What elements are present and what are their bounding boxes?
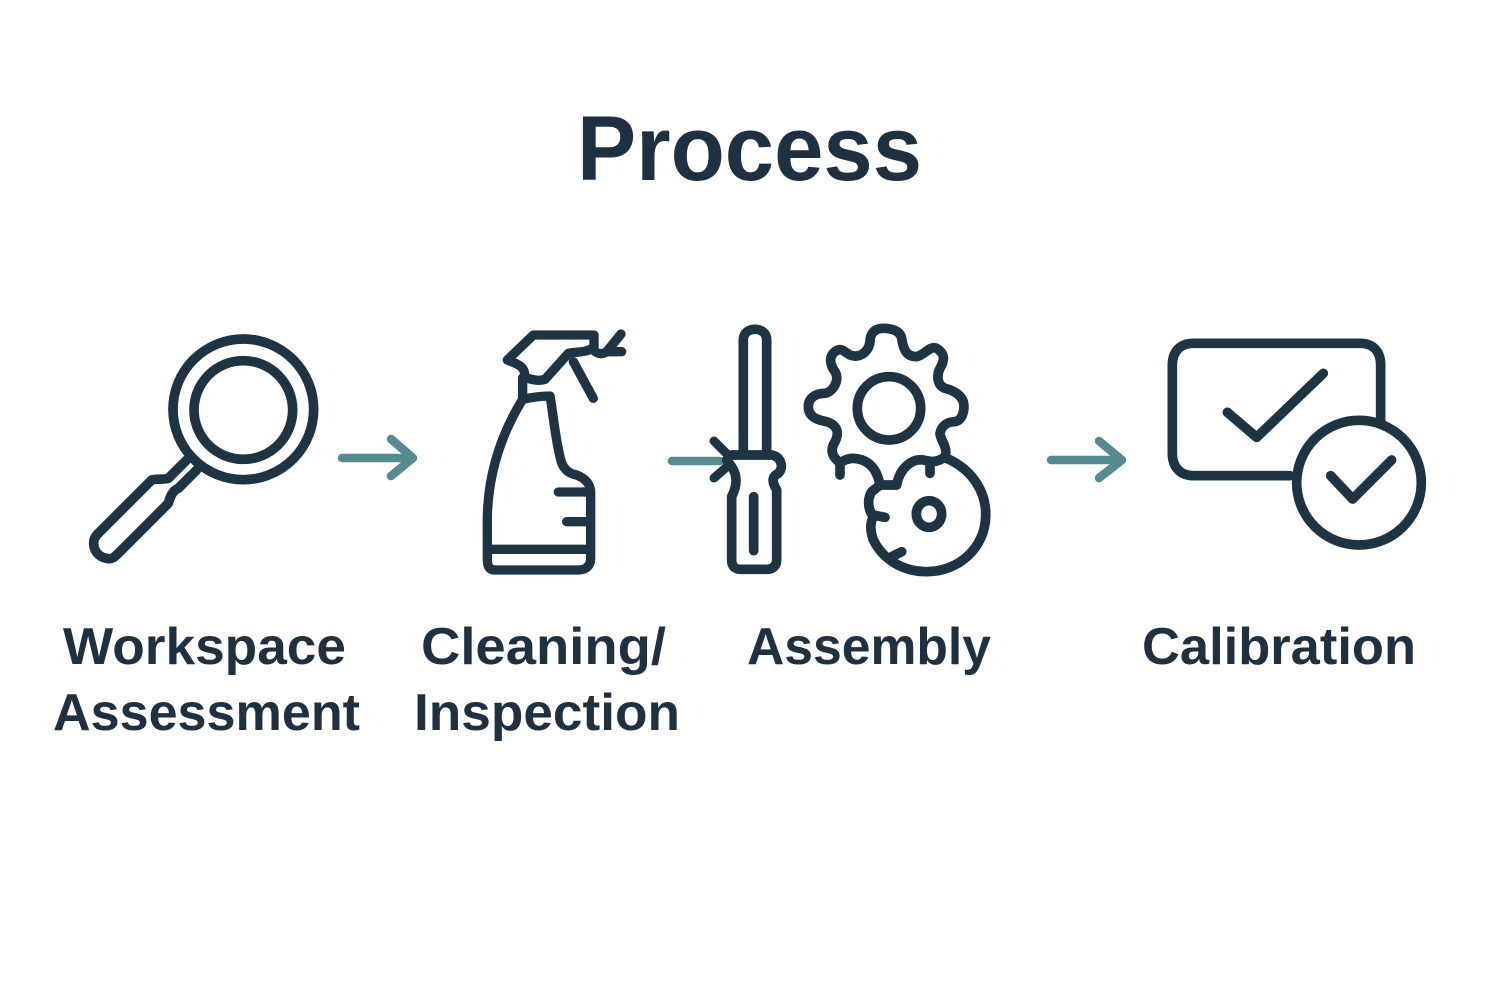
arrow: step 2 to step 3 [672,441,729,478]
label: workspace assessment: Workspace [63,618,346,676]
icon: calibration checks [1172,343,1421,545]
label: cleaning / inspection: Cleaning/ [421,618,666,676]
arrow: step 3 to step 4 [1051,441,1122,478]
label: calibration: Calibration [1142,618,1416,676]
icon: spray bottle [487,334,622,570]
arrow: step 1 to step 2 [342,439,413,476]
title: Process [577,98,922,200]
icon: gears [808,328,986,572]
label: assembly: Assembly [747,618,991,676]
label: cleaning / inspection [414,618,680,742]
label: workspace assessment [53,618,360,742]
label: workspace assessment: Assessment [53,684,360,742]
label: cleaning / inspection: Inspection [414,684,680,742]
icon: screwdriver [727,329,781,569]
icon: magnifying glass [94,339,314,559]
